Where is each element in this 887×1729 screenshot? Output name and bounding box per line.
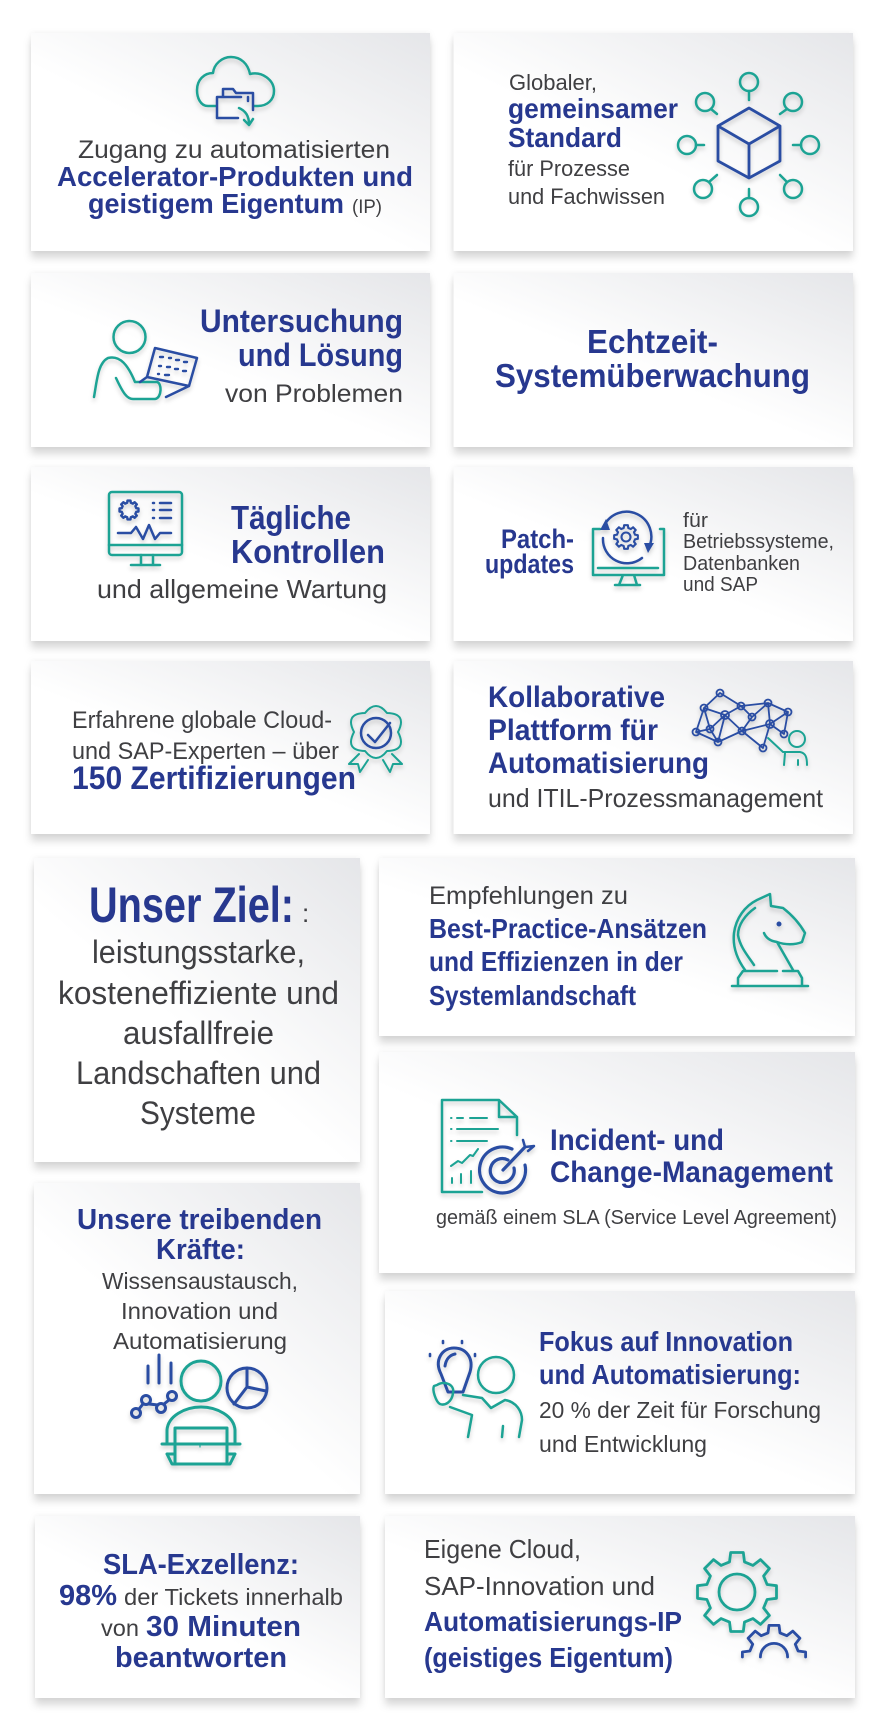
text: own cloud innovation: Automatisierungs-IP <box>424 1606 682 1637</box>
text: daily checks: und allgemeine Wartung <box>97 574 387 604</box>
text: our driving forces: Kräfte: <box>156 1234 245 1266</box>
text: our goal: Landschaften und <box>76 1055 321 1091</box>
icon: light bulb and person <box>430 1341 522 1437</box>
text: incident and change management <box>436 1124 837 1229</box>
text: best practice recommendations: Systemlandschaft <box>429 980 636 1011</box>
text: experienced experts: Erfahrene globale Cloud- <box>72 707 332 734</box>
text: own cloud innovation: SAP-Innovation und <box>424 1571 655 1601</box>
panel: own cloud innovation <box>385 1516 855 1698</box>
text: real-time monitoring: Echtzeit- <box>587 323 718 360</box>
text: collaborative platform: Automatisierung <box>488 747 709 780</box>
icon: document and target <box>442 1100 534 1193</box>
text: patch targets: und SAP <box>683 574 758 596</box>
panel: best practice recommendations <box>379 858 855 1036</box>
text: innovation focus: Fokus auf Innovation <box>539 1326 793 1357</box>
icon: award badge <box>349 706 402 772</box>
text: global common standard: Globaler, <box>509 70 597 95</box>
text: SLA excellence: 30 Minuten <box>146 1611 301 1643</box>
text: SLA excellence <box>59 1549 343 1674</box>
text: patch updates: Patch- <box>501 524 574 554</box>
text: our driving forces: Innovation und <box>121 1298 278 1324</box>
text: our driving forces: Unsere treibenden <box>77 1204 322 1236</box>
text: patch updates <box>485 524 574 579</box>
text: investigation and resolution: und Lösung <box>238 337 403 373</box>
text: experienced experts <box>72 707 356 796</box>
text: daily checks: Kontrollen <box>231 533 385 570</box>
text: incident and change management: gemäß einem SLA (Service Level Agreement) <box>436 1207 837 1229</box>
text: collaborative platform: Plattform für <box>488 714 658 747</box>
text: patch targets <box>683 510 834 596</box>
panel: our driving forces <box>34 1183 360 1494</box>
panel: global standard <box>454 33 853 251</box>
text: collaborative platform: und ITIL-Prozessmanagement <box>488 783 824 813</box>
panel: innovation focus <box>385 1291 855 1494</box>
text: SLA excellence: SLA-Exzellenz: <box>103 1549 299 1581</box>
text: SLA excellence: von <box>101 1615 139 1641</box>
icon: monitor with rotating gear <box>593 512 664 585</box>
text: access to accelerator products: (IP) <box>352 197 382 218</box>
text: experienced experts: und SAP-Experten – über <box>72 738 339 765</box>
text: best practice recommendations: Best-Practice-Ansätzen <box>429 913 707 944</box>
text: our goal <box>58 877 339 1131</box>
icon: team member with laptop and charts <box>132 1355 267 1464</box>
text: real-time monitoring: Systemüberwachung <box>495 357 810 394</box>
text: patch targets: Datenbanken <box>683 553 800 575</box>
text: our driving forces: Wissensaustausch, <box>102 1268 298 1294</box>
panel: incident and change management <box>379 1052 855 1273</box>
text: our goal: Systeme <box>140 1095 256 1131</box>
panel: daily checks <box>31 467 430 641</box>
text: global common standard: und Fachwissen <box>508 184 665 209</box>
icon: cloud with folder <box>197 57 274 125</box>
text: our goal: kosteneffiziente und <box>58 975 339 1011</box>
text: global common standard <box>508 70 678 209</box>
panel: our goal <box>34 858 360 1162</box>
text: patch targets: Betriebssysteme, <box>683 531 834 553</box>
icon: monitor with gear <box>109 492 182 565</box>
text: global common standard: für Prozesse <box>508 156 630 181</box>
text: best practice recommendations: Empfehlungen zu <box>429 882 628 910</box>
panel: certifications <box>31 661 430 834</box>
text: best practice recommendations <box>429 882 707 1011</box>
text: patch updates: updates <box>485 549 574 579</box>
text: investigation and resolution: von Problemen <box>225 380 403 408</box>
text: own cloud innovation: Eigene Cloud, <box>424 1534 581 1564</box>
text: innovation focus: und Automatisierung: <box>539 1359 801 1390</box>
text: investigation and resolution: Untersuchung <box>200 303 403 339</box>
text: real-time monitoring <box>495 323 810 394</box>
text: daily checks: Tägliche <box>231 499 351 536</box>
panel: investigation and resolution <box>31 273 430 447</box>
text: innovation focus <box>539 1326 821 1457</box>
icon: gears <box>698 1552 806 1657</box>
text: SLA excellence: der Tickets innerhalb <box>124 1584 343 1610</box>
text: access to accelerator products: Zugang zu automatisierten <box>78 136 390 164</box>
panel: accelerator products <box>31 33 430 251</box>
text: patch targets: für <box>683 510 708 532</box>
panel: real-time monitoring <box>454 273 853 447</box>
text: own cloud innovation: (geistiges Eigentum) <box>424 1642 673 1673</box>
text: innovation focus: und Entwicklung <box>539 1431 707 1457</box>
icon: person with laptop <box>94 321 197 399</box>
text: our driving forces: Automatisierung <box>113 1328 287 1354</box>
text: daily checks <box>97 499 387 604</box>
panel: collaborative platform <box>454 661 853 834</box>
icon: chess knight <box>732 894 808 986</box>
icon: network and person <box>692 690 807 765</box>
text: collaborative platform <box>488 681 824 813</box>
text: global common standard: gemeinsamer <box>508 93 678 124</box>
text: global common standard: Standard <box>508 122 622 153</box>
text: our goal: ausfallfreie <box>123 1015 274 1051</box>
text: our goal: leistungsstarke, <box>92 934 305 970</box>
icon: cube with pins <box>678 73 819 216</box>
text: own cloud innovation <box>424 1534 682 1673</box>
text: access to accelerator products: geistigem Eigentum <box>88 188 344 219</box>
text: our driving forces <box>77 1204 322 1354</box>
text: access to accelerator products <box>57 136 413 219</box>
text: SLA excellence: 98% <box>59 1580 117 1612</box>
text: innovation focus: 20 % der Zeit für Forschung <box>539 1397 821 1423</box>
panel: SLA excellence <box>35 1516 360 1698</box>
text: investigation and resolution <box>200 303 403 408</box>
text: best practice recommendations: und Effizienzen in der <box>429 946 683 977</box>
text: incident and change management: Incident- und <box>550 1124 724 1157</box>
text: our goal: Unser Ziel: <box>89 877 294 933</box>
text: incident and change management: Change-Management <box>550 1156 833 1189</box>
text: access to accelerator products: Accelerator-Produkten und <box>57 161 413 192</box>
text: experienced experts: 150 Zertifizierungen <box>72 760 356 796</box>
text: our goal: : <box>302 898 309 928</box>
text: SLA excellence: beantworten <box>115 1642 287 1674</box>
text: collaborative platform: Kollaborative <box>488 681 665 714</box>
panel: patch updates <box>454 467 853 641</box>
